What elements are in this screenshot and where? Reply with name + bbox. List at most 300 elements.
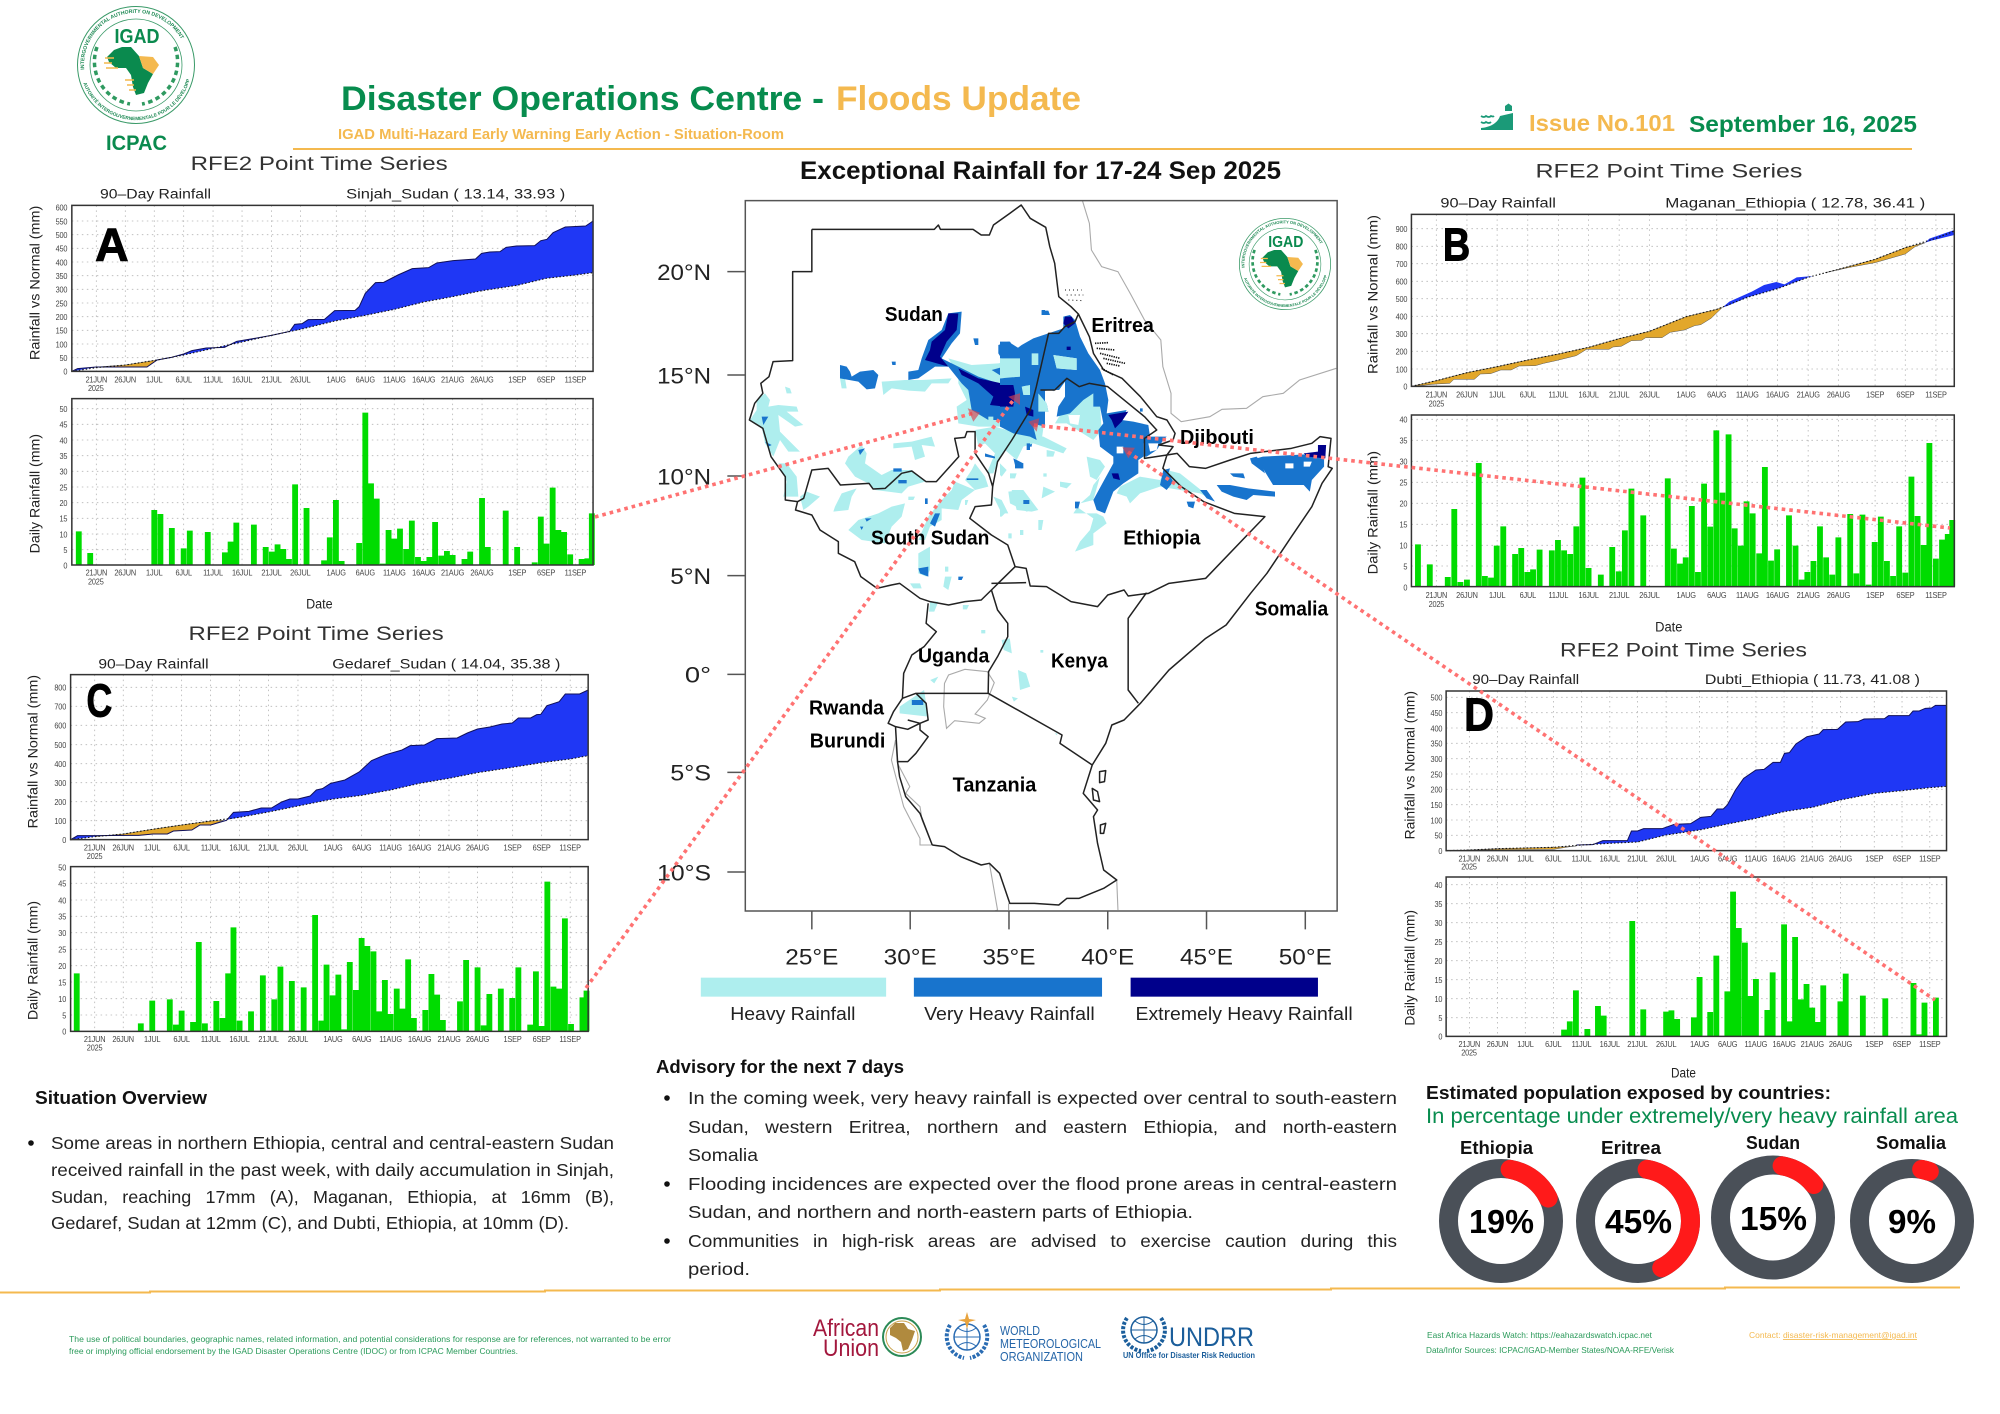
chart A: Sinjah, Sudan: 50	[59, 354, 68, 363]
footer links and sources	[1426, 1330, 1918, 1355]
logo: African Union: African	[813, 1315, 879, 1342]
chart A: Sinjah, Sudan: 11SEP	[565, 568, 586, 577]
chart B: Maganan, Ethiopia: 200	[1396, 347, 1408, 357]
disclaimer: The use of political boundaries, geographic names, related information, and potential considerations for response are for references, not warranted to be error	[69, 1334, 671, 1344]
chart C: Gedaref, Sudan: 21AUG	[437, 843, 461, 853]
country labels: Uganda	[918, 644, 990, 667]
chart A: Sinjah, Sudan: 400	[56, 258, 68, 267]
chart D: Dubti, Ethiopia: 1JUL	[1517, 854, 1534, 863]
chart C: Gedaref, Sudan: Rainfall vs Normal (mm)	[26, 675, 41, 828]
chart D: Dubti, Ethiopia: 300	[1431, 755, 1443, 764]
chart D: Dubti, Ethiopia: 21AUG	[1801, 854, 1824, 863]
chart D: Dubti, Ethiopia: 11AUG	[1745, 1040, 1767, 1049]
chart A: Sinjah, Sudan: 500	[56, 231, 68, 240]
title: Disaster Operations Centre -	[341, 80, 824, 118]
header rule	[293, 148, 1912, 150]
advisory text	[664, 1088, 1397, 1279]
chart B: Maganan, Ethiopia: 6SEP	[1896, 591, 1914, 600]
chart B: Maganan, Ethiopia: 11SEP	[1925, 390, 1947, 400]
logo: UNDRR: UN Office for Disaster Risk Reduction	[1123, 1350, 1255, 1360]
chart A: Sinjah, Sudan: 450	[56, 244, 68, 254]
chart B: Maganan, Ethiopia: 21JUN	[1426, 390, 1448, 400]
chart D: Dubti, Ethiopia: 21AUG	[1801, 1040, 1824, 1049]
chart C: Gedaref, Sudan: 21JUN	[84, 843, 106, 853]
chart A: Sinjah, Sudan: 1JUL	[146, 568, 163, 577]
chart C: Gedaref, Sudan: 1SEP	[503, 1035, 522, 1044]
situation overview text: Some areas in northern Ethiopia, central and central-eastern Sudan	[51, 1133, 614, 1153]
chart A: Sinjah, Sudan: 6JUL	[175, 375, 193, 385]
country labels: Djibouti	[1180, 426, 1254, 448]
chart C: Gedaref, Sudan: 700	[54, 702, 67, 712]
footer links and sources: Contact: disaster-risk-management@igad.int	[1749, 1330, 1918, 1340]
chart A: Sinjah, Sudan: 0	[63, 561, 68, 570]
logo: IGAD ICPAC emblem: AUTORITÉ INTERGOUVERNEMENTALE POUR LE DÉVELOPPEMENT	[83, 79, 190, 120]
chart C: Gedaref, Sudan: Gedaref_Sudan ( 14.04, 35.38 )	[332, 657, 560, 672]
chart B: Maganan, Ethiopia: 11JUL	[1548, 591, 1569, 600]
chart B: Maganan, Ethiopia: Rainfall vs Normal (mm)	[1366, 215, 1381, 374]
donut: Sudan 15%: 15%	[1740, 1200, 1807, 1237]
logo: African Union	[813, 1315, 921, 1362]
chart A: Sinjah, Sudan: 550	[56, 217, 68, 226]
chart C: Gedaref, Sudan: 26AUG	[466, 843, 489, 853]
chart C: Gedaref, Sudan: 25	[58, 945, 67, 955]
chart B: Maganan, Ethiopia: 800	[1396, 242, 1408, 252]
chart C: Gedaref, Sudan: 0	[62, 836, 67, 845]
chart C: Gedaref, Sudan: 11AUG	[379, 843, 402, 853]
chart A: Sinjah, Sudan: 0	[63, 367, 68, 377]
chart C: Gedaref, Sudan: 6SEP	[533, 843, 551, 853]
chart B: Maganan, Ethiopia: 26JUN	[1456, 591, 1478, 600]
country borders	[749, 205, 1332, 905]
logo: IGAD emblem on map	[1239, 218, 1331, 310]
chart B: Maganan, Ethiopia: 2025	[1429, 600, 1445, 609]
chart D: Dubti, Ethiopia: 30	[1434, 919, 1443, 928]
chart B: Maganan, Ethiopia: 11JUL	[1548, 390, 1569, 400]
latitude labels: 0°	[685, 664, 711, 688]
rainfall: far south and east patches	[900, 445, 1326, 735]
chart A: Sinjah, Sudan: 350	[56, 272, 68, 281]
chart D: Dubti, Ethiopia: 35	[1434, 900, 1443, 909]
chart B: Maganan, Ethiopia: 21JUL	[1609, 390, 1630, 400]
chart C: Gedaref, Sudan: 1SEP	[503, 843, 522, 853]
chart D: Dubti, Ethiopia: 16JUL	[1600, 1040, 1621, 1049]
chart B: Maganan, Ethiopia: 11SEP	[1925, 591, 1947, 600]
chart B: Maganan, Ethiopia: 300	[1396, 330, 1408, 339]
chart A: Sinjah, Sudan: 21JUN	[86, 568, 108, 577]
chart A: Sinjah, Sudan: 6AUG	[356, 568, 375, 577]
chart A: Sinjah, Sudan: 26JUL	[290, 568, 311, 577]
chart C: Gedaref, Sudan: 11JUL	[201, 1035, 221, 1044]
chart D: Dubti, Ethiopia: 25	[1434, 938, 1443, 947]
footer rule	[0, 1288, 1960, 1292]
legend	[701, 978, 1353, 1024]
latitude labels: 10°S	[657, 862, 711, 886]
chart C: Gedaref, Sudan: 26JUL	[288, 1035, 309, 1044]
chart A: Sinjah, Sudan: 15	[59, 514, 68, 524]
advisory text: Communities in high-risk areas are advised to exercise caution during this	[688, 1231, 1397, 1251]
chart B: Maganan, Ethiopia: 2025	[1429, 399, 1445, 409]
chart D: Dubti, Ethiopia: 26JUN	[1487, 1040, 1509, 1049]
footer links and sources: East Africa Hazards Watch: https://eahazardswatch.icpac.net	[1427, 1330, 1653, 1340]
chart D: Dubti, Ethiopia: 1SEP	[1865, 854, 1883, 863]
chart C: Gedaref, Sudan: 11AUG	[379, 1035, 402, 1044]
Red Sea island dots	[1065, 290, 1125, 375]
chart D: Dubti, Ethiopia: 21JUN	[1459, 854, 1481, 863]
chart C: Gedaref, Sudan: 11JUL	[201, 843, 221, 853]
chart A: Sinjah, Sudan: 1SEP	[508, 375, 526, 385]
logo: IGAD ICPAC emblem: IGAD	[114, 26, 160, 48]
chart C: Gedaref, Sudan: 1JUL	[144, 1035, 161, 1044]
chart A: Sinjah, Sudan: 20	[59, 499, 68, 508]
chart A: Sinjah, Sudan: 11AUG	[383, 568, 406, 577]
country labels: South Sudan	[871, 527, 989, 549]
donut: Eritrea 45%: 45%	[1605, 1203, 1672, 1240]
chart A: Sinjah, Sudan: 35	[59, 452, 68, 461]
chart B: Maganan, Ethiopia: 20	[1399, 499, 1408, 509]
chart D: Dubti, Ethiopia: Rainfall vs Normal (mm)	[1402, 691, 1418, 839]
longitude labels: 25°E	[785, 946, 838, 970]
chart C: Gedaref, Sudan: 11SEP	[559, 843, 581, 853]
chart A: Sinjah, Sudan: 11JUL	[203, 375, 224, 385]
logo: World Meteorological Organization: WORLD	[1000, 1324, 1040, 1338]
title	[341, 80, 1081, 118]
chart D: Dubti, Ethiopia: 11SEP	[1919, 1040, 1941, 1049]
chart D: Dubti, Ethiopia: 0	[1438, 847, 1443, 856]
chart A: Sinjah, Sudan: 16AUG	[412, 568, 435, 577]
chart A: Sinjah, Sudan: 50	[59, 405, 68, 414]
latitude labels	[657, 261, 711, 886]
chart C: Gedaref, Sudan: 6JUL	[173, 1035, 191, 1044]
chart D: Dubti, Ethiopia	[1402, 639, 1947, 1081]
chart C: Gedaref, Sudan: 1JUL	[144, 843, 161, 853]
chart A: Sinjah, Sudan: 1AUG	[327, 375, 346, 385]
chart C: Gedaref, Sudan: 50	[58, 863, 67, 872]
logo: IGAD ICPAC emblem	[77, 6, 195, 124]
chart B: Maganan, Ethiopia: 40	[1399, 415, 1408, 425]
chart A: Sinjah, Sudan: 6AUG	[356, 375, 375, 385]
chart A: Sinjah, Sudan: 250	[56, 299, 68, 308]
chart A: Sinjah, Sudan: 5	[63, 546, 68, 555]
advisory text: In the coming week, very heavy rainfall is expected over central to south-eastern	[688, 1088, 1397, 1108]
donut: Ethiopia 19%: Ethiopia	[1460, 1138, 1534, 1158]
donut: Ethiopia 19%: 19%	[1469, 1203, 1534, 1240]
chart A: Sinjah, Sudan: 300	[56, 285, 68, 295]
chart B: Maganan, Ethiopia: 500	[1396, 295, 1408, 304]
chart C: Gedaref, Sudan: 2025	[87, 1043, 103, 1052]
issue date: September 16, 2025	[1689, 111, 1917, 137]
chart A: Sinjah, Sudan: 150	[56, 326, 68, 336]
donut: Somalia 9%	[1851, 1133, 1973, 1282]
chart B: Maganan, Ethiopia: 600	[1396, 277, 1408, 287]
chart D: Dubti, Ethiopia: 11SEP	[1919, 854, 1941, 863]
longitude labels: 40°E	[1081, 946, 1134, 970]
chart A: Sinjah, Sudan: 26JUN	[114, 375, 136, 385]
chart A: Sinjah, Sudan: A	[95, 219, 129, 271]
chart D: Dubti, Ethiopia: 5	[1438, 1014, 1443, 1023]
chart C: Gedaref, Sudan	[26, 622, 588, 1052]
chart C: Gedaref, Sudan: 10	[58, 995, 67, 1004]
chart C: Gedaref, Sudan: 1AUG	[323, 1035, 343, 1044]
chart D: Dubti, Ethiopia: 26JUN	[1487, 854, 1509, 863]
logo: IGAD emblem on map: INTERGOVERNMENTAL AUTHORITY ON DEVELOPMENT	[1242, 220, 1323, 268]
donut: Somalia 9%: 9%	[1888, 1203, 1936, 1240]
chart D: Dubti, Ethiopia: Daily Rainfall (mm)	[1402, 910, 1418, 1026]
chart C: Gedaref, Sudan: 16AUG	[408, 1035, 431, 1044]
logo: African Union: Union	[823, 1335, 879, 1362]
country labels: Ethiopia	[1123, 527, 1201, 549]
chart D: Dubti, Ethiopia: 6JUL	[1545, 1040, 1562, 1049]
country labels: Sudan	[885, 303, 943, 325]
logo: IGAD emblem on map: AUTORITÉ INTERGOUVERNEMENTALE POUR LE DÉVELOPPEMENT	[1244, 275, 1326, 307]
chart A: Sinjah, Sudan: Rainfall vs Normal (mm)	[28, 206, 43, 360]
chart C: Gedaref, Sudan: 100	[54, 817, 67, 826]
advisory text: Somalia	[688, 1145, 758, 1165]
chart B: Maganan, Ethiopia: 16AUG	[1766, 390, 1789, 400]
situation overview heading: Situation Overview	[35, 1088, 208, 1108]
chart B: Maganan, Ethiopia: Daily Rainfall (mm)	[1366, 451, 1381, 574]
chart D: Dubti, Ethiopia: 1AUG	[1690, 854, 1709, 863]
chart B: Maganan, Ethiopia: 21AUG	[1797, 390, 1820, 400]
chart D: Dubti, Ethiopia: 11JUL	[1572, 1040, 1592, 1049]
chart B: Maganan, Ethiopia: 16AUG	[1766, 591, 1789, 600]
chart A: Sinjah, Sudan: 21AUG	[441, 375, 464, 385]
donut: Eritrea 45%: Eritrea	[1601, 1138, 1662, 1158]
chart D: Dubti, Ethiopia: 0	[1438, 1032, 1443, 1042]
chart D: Dubti, Ethiopia: 1SEP	[1865, 1040, 1883, 1049]
chart C: Gedaref, Sudan: 26JUN	[112, 1035, 134, 1044]
chart A: Sinjah, Sudan: 21JUL	[261, 375, 282, 385]
chart D: Dubti, Ethiopia: 26JUL	[1656, 1040, 1677, 1049]
chart A: Sinjah, Sudan: 2025	[88, 577, 104, 586]
situation overview text	[28, 1133, 614, 1233]
chart B: Maganan, Ethiopia: RFE2 Point Time Series	[1536, 160, 1803, 182]
chart C: Gedaref, Sudan: 6SEP	[533, 1035, 551, 1044]
chart C: Gedaref, Sudan: 2025	[87, 852, 103, 861]
gray coast and lakes	[891, 201, 1336, 911]
chart C: Gedaref, Sudan: 300	[54, 779, 67, 788]
chart D: Dubti, Ethiopia: 2025	[1461, 1048, 1478, 1057]
chart D: Dubti, Ethiopia: 26AUG	[1829, 854, 1852, 863]
chart A: Sinjah, Sudan: 16JUL	[232, 375, 253, 385]
advisory text: Sudan, and northern and north-eastern parts of Ethiopia.	[688, 1202, 1193, 1222]
chart B: Maganan, Ethiopia: 0	[1403, 382, 1408, 392]
chart D: Dubti, Ethiopia: 16JUL	[1600, 854, 1621, 863]
chart A: Sinjah, Sudan: Date	[306, 597, 333, 612]
logo: IGAD ICPAC emblem: INTERGOVERNMENTAL AUTHORITY ON DEVELOPMENT	[80, 9, 184, 70]
chart B: Maganan, Ethiopia: 700	[1396, 260, 1408, 269]
chart A: Sinjah, Sudan: 21AUG	[441, 568, 464, 577]
chart B: Maganan, Ethiopia: 11AUG	[1736, 591, 1759, 600]
chart B: Maganan, Ethiopia: 400	[1396, 312, 1408, 322]
chart D: Dubti, Ethiopia: 150	[1431, 801, 1443, 810]
chart D: Dubti, Ethiopia: 200	[1431, 785, 1443, 795]
chart B: Maganan, Ethiopia: 1SEP	[1866, 390, 1884, 400]
chart D: Dubti, Ethiopia: 6AUG	[1718, 1040, 1737, 1049]
chart C: Gedaref, Sudan: 6AUG	[352, 1035, 371, 1044]
chart A: Sinjah, Sudan: 30	[59, 467, 68, 477]
latitude labels: 5°N	[670, 565, 711, 589]
chart B: Maganan, Ethiopia: 1JUL	[1489, 390, 1506, 400]
latitude labels: 10°N	[657, 466, 711, 490]
chart B: Maganan, Ethiopia: 35	[1399, 436, 1408, 446]
chart B: Maganan, Ethiopia: 1JUL	[1489, 591, 1506, 600]
latitude labels: 20°N	[657, 261, 711, 285]
chart B: Maganan, Ethiopia: 6AUG	[1707, 591, 1726, 600]
chart D: Dubti, Ethiopia: 6JUL	[1545, 854, 1562, 863]
chart D: Dubti, Ethiopia: 15	[1434, 976, 1443, 985]
chart A: Sinjah, Sudan: 6SEP	[537, 375, 555, 385]
chart B: Maganan, Ethiopia: 100	[1396, 365, 1408, 374]
chart B: Maganan, Ethiopia: 30	[1399, 457, 1408, 467]
chart C: Gedaref, Sudan: 30	[58, 929, 67, 938]
chart B: Maganan, Ethiopia: 10	[1399, 541, 1408, 551]
chart A: Sinjah, Sudan: 25	[59, 483, 68, 492]
chart D: Dubti, Ethiopia: 1JUL	[1517, 1040, 1534, 1049]
chart C: Gedaref, Sudan: C	[87, 675, 112, 727]
chart C: Gedaref, Sudan: Daily Rainfall (mm)	[26, 901, 41, 1020]
country labels: Burundi	[810, 730, 885, 752]
chart C: Gedaref, Sudan: 600	[54, 721, 67, 731]
map heading: Exceptional Rainfall for 17-24 Sep 2025	[800, 157, 1281, 185]
country labels: Eritrea	[1091, 314, 1154, 336]
chart B: Maganan, Ethiopia: 26JUL	[1639, 591, 1660, 600]
chart D: Dubti, Ethiopia: Dubti_Ethiopia ( 11.73, 41.08 )	[1705, 672, 1920, 688]
chart B: Maganan, Ethiopia: 26AUG	[1827, 591, 1850, 600]
advisory text: Flooding incidences are expected over the flood prone areas in central-eastern	[688, 1174, 1397, 1194]
map frame and ticks	[727, 201, 1337, 929]
chart C: Gedaref, Sudan: 16JUL	[229, 1035, 250, 1044]
subtitle: IGAD Multi-Hazard Early Warning Early Action - Situation-Room	[338, 127, 784, 143]
chart B: Maganan, Ethiopia: 6SEP	[1896, 390, 1914, 400]
logo label: ICPAC: ICPAC	[106, 132, 167, 155]
chart B: Maganan, Ethiopia: 6JUL	[1520, 390, 1537, 400]
chart A: Sinjah, Sudan: 600	[56, 203, 68, 213]
chart D: Dubti, Ethiopia: 21JUL	[1627, 1040, 1648, 1049]
chart C: Gedaref, Sudan: 400	[54, 760, 67, 769]
donut: Ethiopia 19%	[1440, 1138, 1562, 1282]
chart C: Gedaref, Sudan: 21JUL	[258, 843, 280, 853]
chart D: Dubti, Ethiopia: 11AUG	[1745, 854, 1767, 863]
chart D: Dubti, Ethiopia: 1AUG	[1690, 1040, 1709, 1049]
chart D: Dubti, Ethiopia: 90–Day Rainfall	[1472, 672, 1579, 688]
chart A: Sinjah, Sudan: 21JUL	[261, 568, 282, 577]
chart C: Gedaref, Sudan: 35	[58, 912, 67, 922]
chart C: Gedaref, Sudan: 0	[62, 1027, 67, 1037]
country labels: Rwanda	[809, 697, 885, 719]
chart B: Maganan, Ethiopia: 900	[1396, 225, 1408, 234]
longitude labels: 50°E	[1279, 946, 1332, 970]
chart A: Sinjah, Sudan: 6JUL	[175, 568, 193, 577]
chart B: Maganan, Ethiopia: 90–Day Rainfall	[1440, 196, 1556, 211]
logo: IGAD emblem on map: IGAD	[1268, 234, 1303, 251]
country labels: Kenya	[1051, 650, 1108, 672]
chart B: Maganan, Ethiopia: 21JUN	[1426, 591, 1448, 600]
chart C: Gedaref, Sudan: 11SEP	[559, 1035, 581, 1044]
chart C: Gedaref, Sudan: 800	[54, 683, 67, 693]
chart A: Sinjah, Sudan: 10	[59, 530, 68, 539]
chart D: Dubti, Ethiopia: RFE2 Point Time Series	[1560, 639, 1807, 661]
situation overview text: Sudan, reaching 17mm (A), Maganan, Ethiopia, at 16mm (B),	[51, 1187, 614, 1207]
rainfall: Sudan and South Sudan	[750, 310, 1045, 590]
longitude labels	[785, 946, 1332, 970]
legend: Very Heavy Rainfall	[924, 1004, 1095, 1024]
chart B: Maganan, Ethiopia: 21JUL	[1609, 591, 1630, 600]
chart A: Sinjah, Sudan: 45	[59, 420, 68, 430]
donut: Sudan 15%: Sudan	[1746, 1133, 1800, 1153]
logo: World Meteorological Organization: METEOROLOGICAL	[1000, 1337, 1101, 1351]
donut: Somalia 9%: Somalia	[1876, 1133, 1947, 1153]
logo: World Meteorological Organization	[947, 1312, 1101, 1364]
chart C: Gedaref, Sudan: 1AUG	[323, 843, 343, 853]
rainfall: Ethiopia and Eritrea	[1000, 311, 1275, 552]
chart C: Gedaref, Sudan: 26JUL	[288, 843, 309, 853]
advisory heading: Advisory for the next 7 days	[656, 1057, 904, 1077]
chart C: Gedaref, Sudan: 500	[54, 741, 67, 750]
chart A: Sinjah, Sudan: 26JUN	[114, 568, 136, 577]
chart B: Maganan, Ethiopia: 1AUG	[1677, 390, 1696, 400]
chart C: Gedaref, Sudan: 40	[58, 896, 67, 905]
chart D: Dubti, Ethiopia: 50	[1434, 831, 1443, 841]
chart D: Dubti, Ethiopia: 450	[1431, 709, 1443, 718]
donut: Eritrea 45%	[1577, 1138, 1699, 1282]
chart A: Sinjah, Sudan: 6SEP	[537, 568, 555, 577]
chart C: Gedaref, Sudan: 16JUL	[229, 843, 250, 853]
chart C: Gedaref, Sudan: RFE2 Point Time Series	[189, 622, 444, 644]
donut: Sudan 15%	[1712, 1133, 1834, 1278]
chart C: Gedaref, Sudan: 90–Day Rainfall	[98, 657, 209, 672]
chart D: Dubti, Ethiopia: 26AUG	[1829, 1040, 1852, 1049]
chart A: Sinjah, Sudan: 16AUG	[412, 375, 435, 385]
logo: World Meteorological Organization: ORGANIZATION	[1000, 1350, 1083, 1364]
chart D: Dubti, Ethiopia: 500	[1431, 693, 1443, 703]
longitude labels: 35°E	[982, 946, 1036, 970]
chart C: Gedaref, Sudan: 21JUN	[84, 1035, 106, 1044]
chart B: Maganan, Ethiopia: 26JUL	[1639, 390, 1660, 400]
chart C: Gedaref, Sudan: 16AUG	[408, 843, 431, 853]
chart A: Sinjah, Sudan: 11SEP	[565, 375, 586, 385]
exposure heading: Estimated population exposed by countries:	[1426, 1082, 1831, 1103]
icon: lighthouse and waves	[1481, 104, 1513, 130]
chart C: Gedaref, Sudan: 6JUL	[173, 843, 191, 853]
chart A: Sinjah, Sudan: 21JUN	[86, 375, 108, 385]
exposure sub-heading: In percentage under extremely/very heavy rainfall area	[1426, 1104, 1958, 1128]
chart B: Maganan, Ethiopia: 16JUL	[1578, 390, 1600, 400]
chart D: Dubti, Ethiopia: 350	[1431, 739, 1443, 749]
chart B: Maganan, Ethiopia: 16JUL	[1578, 591, 1600, 600]
chart D: Dubti, Ethiopia: 100	[1431, 816, 1443, 825]
latitude labels: 5°S	[670, 762, 711, 786]
chart A: Sinjah, Sudan: 1JUL	[146, 375, 163, 385]
chart D: Dubti, Ethiopia: 400	[1431, 724, 1443, 733]
situation overview text: Gedaref, Sudan at 12mm (C), and Dubti, Ethiopia, at 10mm (D).	[51, 1213, 569, 1233]
longitude labels: 45°E	[1180, 946, 1233, 970]
chart A: Sinjah, Sudan: 1AUG	[327, 568, 346, 577]
chart B: Maganan, Ethiopia: 5	[1403, 562, 1408, 571]
issue number: Issue No.101	[1529, 110, 1675, 136]
logo: UNDRR: UNDRR	[1169, 1322, 1254, 1352]
chart B: Maganan, Ethiopia: 1AUG	[1677, 591, 1696, 600]
chart A: Sinjah, Sudan: 16JUL	[232, 568, 253, 577]
advisory text: Sudan, western Eritrea, northern and eastern Ethiopia, and north-eastern	[688, 1117, 1397, 1137]
chart C: Gedaref, Sudan: 26AUG	[466, 1035, 489, 1044]
chart B: Maganan, Ethiopia: Date	[1655, 620, 1682, 635]
longitude labels: 30°E	[884, 946, 937, 970]
chart A: Sinjah, Sudan: 90–Day Rainfall	[100, 187, 211, 202]
chart C: Gedaref, Sudan: 6AUG	[352, 843, 371, 853]
chart A: Sinjah, Sudan: 40	[59, 436, 68, 445]
chart D: Dubti, Ethiopia: 16AUG	[1772, 1040, 1796, 1049]
chart D: Dubti, Ethiopia: 16AUG	[1772, 854, 1796, 863]
